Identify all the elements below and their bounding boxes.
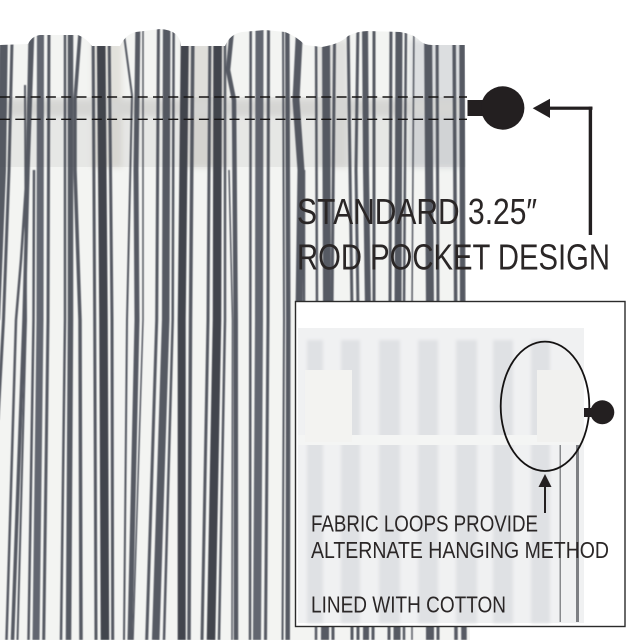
dashed line: bottom of rod pocket [0,118,467,120]
text: fabric loops note [311,511,609,563]
inset: curtain lining photo [298,328,584,623]
icon: small rod with finial [584,400,614,424]
text: fabric loops note: FABRIC LOOPS PROVIDE [311,511,538,537]
callout: ellipse around fabric loop [501,342,589,471]
arrow: pointing to fabric loop [538,474,552,513]
arrow: pointing to rod [533,99,592,235]
panel: striped curtain photo [0,20,470,640]
heading: standard rod pocket design: STANDARD 3.25″ [297,191,537,232]
icon: curtain rod with finial [468,86,524,130]
heading: standard rod pocket design [297,191,610,278]
panel: inset back view [296,302,625,626]
dashed line: top of rod pocket [0,96,467,98]
text: lined with cotton: LINED WITH COTTON [311,592,506,618]
